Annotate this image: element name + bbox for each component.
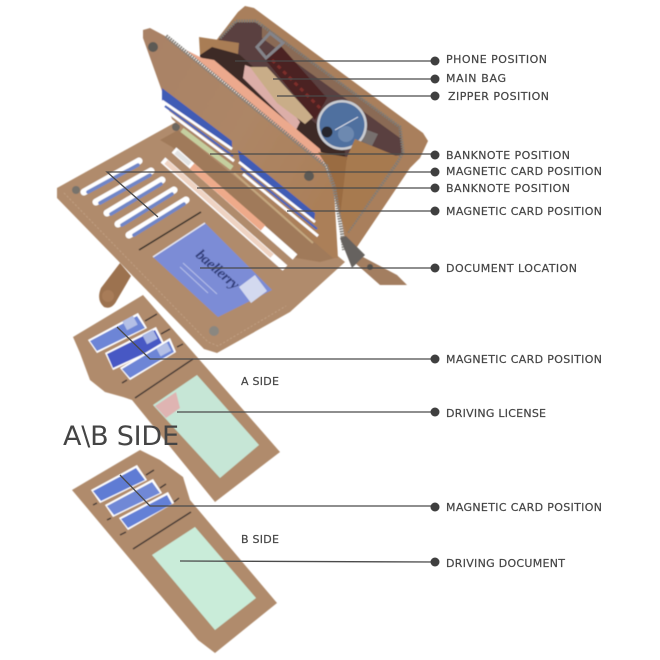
slits xyxy=(93,470,191,549)
window: driving document xyxy=(152,527,256,630)
callout labels: MAGNETIC CARD POSITION xyxy=(446,501,602,514)
banknote xyxy=(243,65,313,130)
callout labels: BANKNOTE POSITION xyxy=(446,149,570,162)
slits xyxy=(122,314,193,398)
left cards xyxy=(162,88,234,168)
callout labels: MAIN BAG xyxy=(446,72,506,85)
snap xyxy=(172,123,180,131)
inner strip xyxy=(262,24,400,138)
pink card strip xyxy=(186,50,324,165)
callout labels: DRIVING DOCUMENT xyxy=(446,557,565,570)
callout labels: MAGNETIC CARD POSITION xyxy=(446,165,602,178)
callout labels: BANKNOTE POSITION xyxy=(446,182,570,195)
zipper front xyxy=(166,36,344,250)
wallet insert: B side xyxy=(72,450,277,653)
label: A side: A SIDE xyxy=(241,375,279,388)
label: B side: B SIDE xyxy=(241,533,279,546)
watch strap xyxy=(257,33,327,120)
cards xyxy=(88,313,176,380)
flap xyxy=(143,28,338,258)
callout labels: DOCUMENT LOCATION xyxy=(446,262,577,275)
callout labels: DRIVING LICENSE xyxy=(446,407,546,420)
lower panel dark compartment xyxy=(160,130,335,262)
zipper tab xyxy=(340,236,407,285)
stitching xyxy=(64,193,286,346)
window: driving license xyxy=(153,375,259,478)
snap xyxy=(72,186,80,194)
wallet insert: A side xyxy=(73,295,280,502)
snap xyxy=(148,42,158,52)
small flap xyxy=(199,37,239,55)
callout dots xyxy=(430,56,440,566)
card slots xyxy=(84,161,186,235)
snap xyxy=(209,326,219,336)
interior lining xyxy=(200,22,403,160)
callout labels: ZIPPER POSITION xyxy=(448,90,549,103)
callout labels: PHONE POSITION xyxy=(446,53,547,66)
strap with snap xyxy=(99,263,131,308)
zipper back xyxy=(220,21,403,233)
callout labels xyxy=(446,53,602,570)
watch xyxy=(317,100,378,150)
lower panel xyxy=(57,122,345,353)
back cover xyxy=(215,6,428,247)
cards xyxy=(91,465,174,530)
inner pocket flap xyxy=(340,139,399,233)
callout labels: MAGNETIC CARD POSITION xyxy=(446,353,602,366)
center pocket xyxy=(200,38,345,160)
snap xyxy=(304,171,314,181)
document window: baellerry xyxy=(192,247,242,293)
pocket gusset xyxy=(318,152,347,217)
wallet: open main wallet xyxy=(57,6,428,353)
right cards xyxy=(234,150,318,243)
document window xyxy=(153,223,272,317)
slit xyxy=(139,212,201,250)
side title: A\B SIDE xyxy=(63,421,179,452)
callout lines xyxy=(107,61,435,562)
banknote strips xyxy=(163,150,295,268)
callout labels: MAGNETIC CARD POSITION xyxy=(446,205,602,218)
